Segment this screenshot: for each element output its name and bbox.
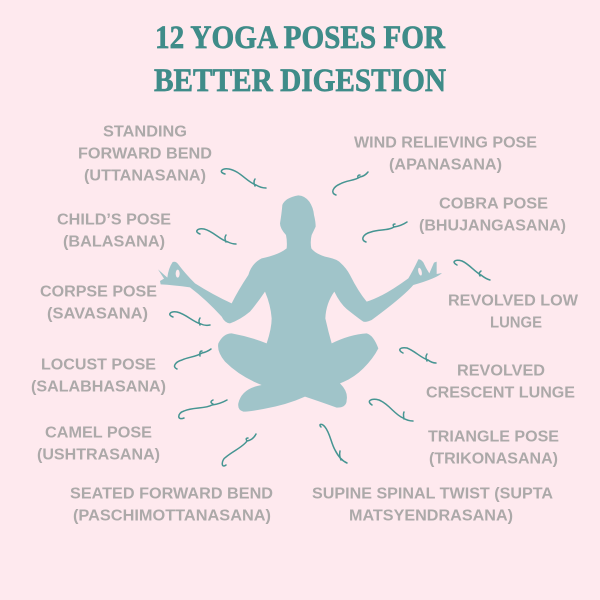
swirl: corpse pose — [170, 312, 210, 325]
label: cobra pose: COBRA POSE — [439, 196, 548, 212]
swirl: camel pose — [179, 400, 227, 419]
label: child's pose — [57, 212, 171, 250]
title: 12 YOGA POSES FOR — [155, 20, 446, 56]
swirl: revolved low lunge — [454, 260, 490, 280]
label: revolved crescent lunge — [426, 362, 575, 402]
swirl: wind relieving pose — [333, 172, 368, 195]
label: revolved low lunge: LUNGE — [490, 314, 542, 332]
label: camel pose — [37, 424, 160, 464]
label: revolved low lunge: REVOLVED LOW — [448, 292, 579, 310]
title — [154, 20, 446, 99]
label: supine spinal twist: MATSYENDRASANA) — [349, 508, 513, 524]
label: supine spinal twist — [312, 486, 553, 524]
label: wind relieving pose: (APANASANA) — [389, 156, 502, 174]
label: revolved low lunge — [448, 292, 579, 332]
label: locust pose: LOCUST POSE — [41, 356, 156, 374]
swirl: triangle pose — [369, 399, 413, 421]
label: triangle pose — [428, 428, 559, 468]
label: child's pose: CHILD’S POSE — [57, 212, 171, 228]
label: corpse pose: CORPSE POSE — [40, 284, 157, 300]
swirl: supine spinal twist — [320, 424, 347, 463]
label: child's pose: (BALASANA) — [63, 234, 165, 250]
label: locust pose: (SALABHASANA) — [31, 378, 166, 396]
label: standing forward bend: STANDING — [103, 124, 187, 140]
label: cobra pose — [419, 196, 566, 234]
swirl: revolved crescent lunge — [400, 348, 436, 363]
label: standing forward bend: FORWARD BEND — [78, 146, 212, 162]
label: standing forward bend: (UTTANASANA) — [84, 168, 206, 184]
label: wind relieving pose — [354, 134, 537, 174]
label: triangle pose: (TRIKONASANA) — [429, 450, 558, 468]
label: corpse pose: (SAVASANA) — [47, 306, 148, 322]
label: triangle pose: TRIANGLE POSE — [428, 428, 559, 446]
label: corpse pose — [40, 284, 157, 322]
swirl: cobra pose — [363, 222, 407, 242]
title: BETTER DIGESTION — [154, 63, 446, 99]
swirl: seated forward bend — [222, 434, 256, 466]
label: revolved crescent lunge: CRESCENT LUNGE — [426, 384, 575, 402]
label: cobra pose: (BHUJANGASANA) — [419, 218, 566, 234]
label: camel pose: CAMEL POSE — [45, 424, 152, 442]
label: revolved crescent lunge: REVOLVED — [457, 362, 545, 380]
label: seated forward bend: (PASCHIMOTTANASANA) — [73, 508, 271, 524]
swirl: standing forward bend — [221, 169, 266, 188]
label: seated forward bend — [70, 486, 273, 524]
swirl: child's pose — [197, 229, 236, 244]
label: standing forward bend — [78, 124, 212, 184]
label: locust pose — [31, 356, 166, 396]
label: seated forward bend: SEATED FORWARD BEND — [70, 486, 273, 502]
icon: meditating figure silhouette — [158, 195, 442, 412]
swirl: locust pose — [175, 349, 211, 369]
label: wind relieving pose: WIND RELIEVING POSE — [354, 134, 537, 152]
label: camel pose: (USHTRASANA) — [37, 446, 160, 464]
label: supine spinal twist: SUPINE SPINAL TWIST (SUPTA — [312, 486, 553, 502]
